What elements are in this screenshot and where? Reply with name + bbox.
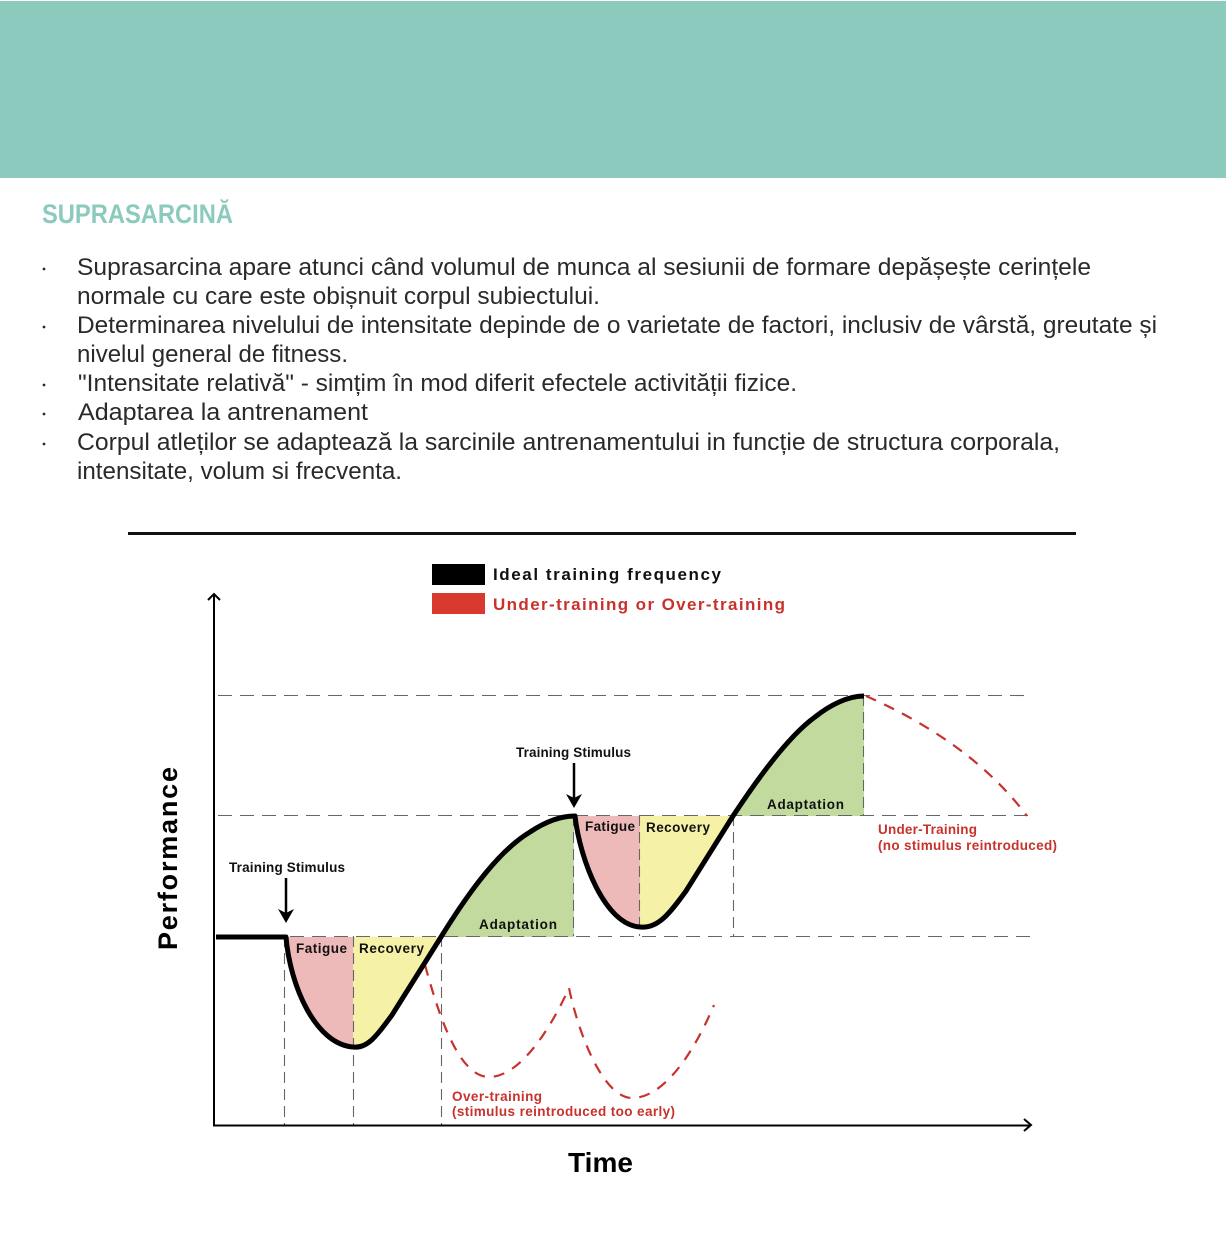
axis labels xyxy=(153,767,633,1178)
axis labels: Performance xyxy=(153,767,183,950)
bullet list: nivelul general de fitness. xyxy=(77,341,348,368)
bullet list: normale cu care este obișnuit corpul subiectului. xyxy=(77,283,600,310)
red dashed alternatives xyxy=(425,696,1027,1098)
bullet list: Determinarea nivelului de intensitate depinde de o varietate de factori, inclusiv de vârstă, greutate și xyxy=(77,312,1157,339)
axis labels: Time xyxy=(568,1147,633,1178)
phase labels: Recovery xyxy=(359,941,424,956)
bullet list: Corpul atleților se adaptează la sarcinile antrenamentului in funcție de structura corporala, xyxy=(77,429,1060,456)
heading: SUPRASARCINĂ xyxy=(42,198,233,229)
legend: Ideal training frequency xyxy=(493,565,722,584)
bullet list: "Intensitate relativă" - simțim în mod diferit efectele activității fizice. xyxy=(78,370,797,397)
bullet list: intensitate, volum si frecventa. xyxy=(77,458,402,485)
phase labels: Fatigue xyxy=(585,819,635,834)
red annotations: (no stimulus reintroduced) xyxy=(878,838,1057,853)
bullet list xyxy=(43,254,1157,485)
red annotations: Over-training xyxy=(452,1089,542,1104)
red annotations xyxy=(452,822,1057,1119)
phase labels: Training Stimulus xyxy=(229,860,345,875)
phase labels: Adaptation xyxy=(767,797,844,812)
axes xyxy=(208,594,1031,1131)
phase labels: Adaptation xyxy=(479,917,557,932)
phase labels xyxy=(229,745,844,956)
main performance curve xyxy=(216,696,864,1047)
legend xyxy=(432,564,785,614)
phase labels: Fatigue xyxy=(296,941,347,956)
legend: Under-training or Over-training xyxy=(493,595,785,614)
chart: training frequency curve xyxy=(153,564,1057,1178)
bullet list: Adaptarea la antrenament xyxy=(78,399,368,426)
dashed guide lines xyxy=(218,695,1030,1125)
red annotations: (stimulus reintroduced too early) xyxy=(452,1104,675,1119)
phase labels: Recovery xyxy=(646,820,710,835)
stimulus arrows xyxy=(278,763,582,923)
red annotations: Under-Training xyxy=(878,822,977,837)
header band xyxy=(0,1,1226,178)
bullet list: Suprasarcina apare atunci când volumul de munca al sesiunii de formare depășește cerințele xyxy=(77,254,1091,281)
shaded phases xyxy=(286,696,864,1047)
phase labels: Training Stimulus xyxy=(516,745,631,760)
